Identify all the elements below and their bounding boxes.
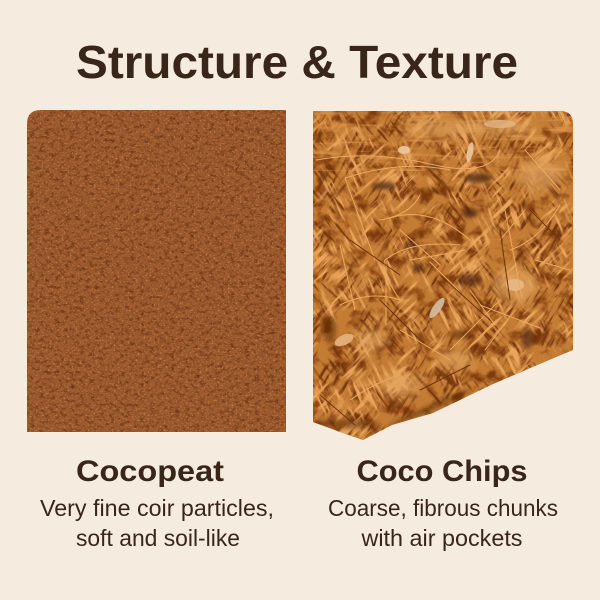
description: coco chips bbox=[328, 495, 558, 551]
title: Structure & Texture bbox=[76, 36, 518, 88]
description: coco chips: with air pockets bbox=[360, 525, 522, 551]
panel: cocopeat texture photo bbox=[27, 110, 286, 432]
description: cocopeat: soft and soil-like bbox=[76, 525, 240, 551]
pale chips bbox=[333, 120, 524, 349]
description: cocopeat: Very fine coir particles, bbox=[40, 495, 274, 521]
description: coco chips: Coarse, fibrous chunks bbox=[328, 495, 558, 521]
heading: cocopeat: Cocopeat bbox=[76, 455, 224, 488]
description: cocopeat bbox=[40, 495, 274, 551]
fibers bbox=[316, 150, 570, 400]
top face horizontal fibres bbox=[313, 111, 573, 171]
light chunk patches bbox=[354, 121, 562, 397]
tufts of fibre running in different directions bbox=[313, 111, 573, 439]
panel: coco chips texture photo bbox=[313, 111, 573, 440]
dark shadow pockets bbox=[311, 162, 533, 429]
label: cocopeat bbox=[40, 455, 274, 551]
heading: coco chips: Coco Chips bbox=[356, 455, 528, 488]
label: coco chips bbox=[328, 455, 558, 551]
